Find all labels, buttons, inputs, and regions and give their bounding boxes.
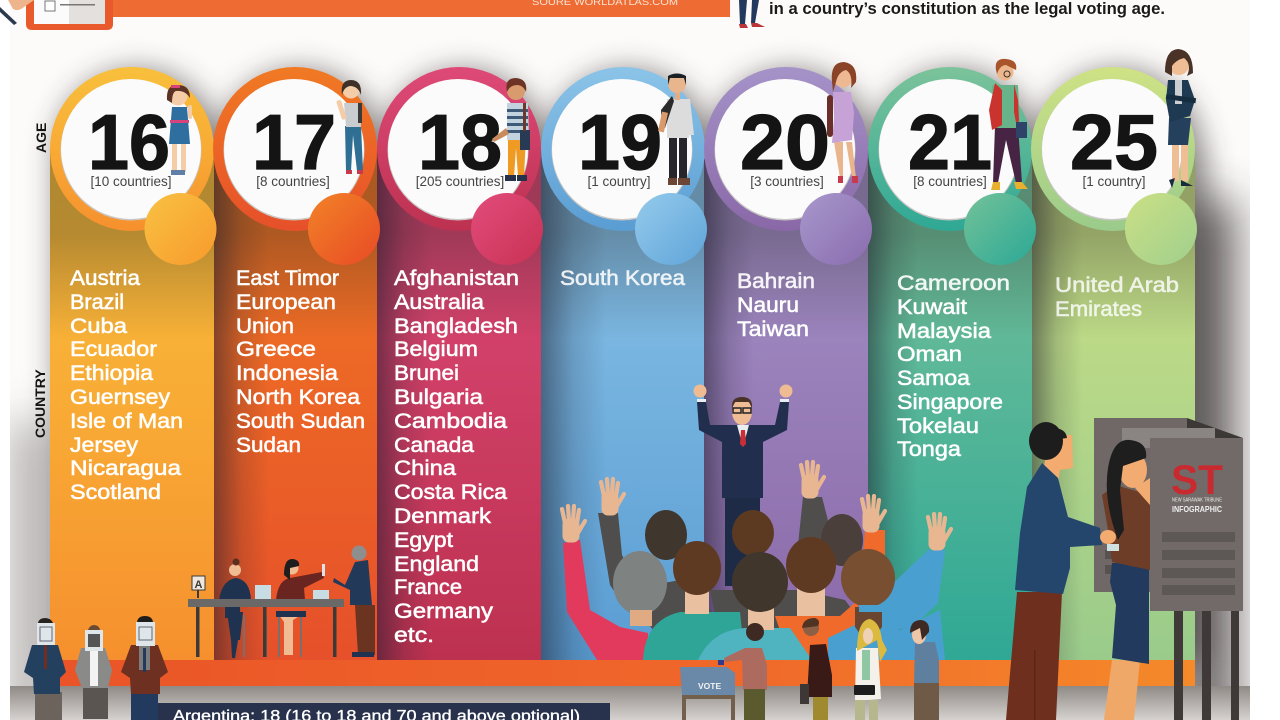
panel: age 19 column xyxy=(541,149,704,660)
decorative bubble: age 19 xyxy=(635,193,707,265)
country list: age 16 xyxy=(70,266,183,504)
age number 19: 19 xyxy=(578,98,662,186)
decorative bubble: age 17 xyxy=(308,193,380,265)
icon: ballot clipboard with hand xyxy=(0,0,113,30)
country list: age 18: Denmark xyxy=(394,504,491,528)
age number 17: 17 xyxy=(252,98,336,186)
ballot box label: VOTE xyxy=(698,681,721,691)
logo: publication name: NEW SARAWAK TRIBUNE xyxy=(1172,498,1223,504)
country list: age 18: Belgium xyxy=(394,337,478,361)
student figure 17 xyxy=(336,80,363,174)
footnote box xyxy=(158,703,610,720)
country list: age 25 xyxy=(1055,273,1179,321)
country list: age 17: Greece xyxy=(236,337,316,361)
ring: age 21 xyxy=(868,67,1032,231)
country list: age 16: Guernsey xyxy=(70,385,170,409)
country list: age 21: Cameroon xyxy=(897,271,1010,295)
orange base strip xyxy=(50,660,1195,686)
voting booth xyxy=(1094,418,1243,720)
age number 20: 20 xyxy=(740,98,830,186)
country list: age 16: Ethiopia xyxy=(70,361,153,385)
student figure 16 xyxy=(167,85,192,175)
age number 25: 25 xyxy=(1070,98,1158,186)
logo: infographic tag: INFOGRAPHIC xyxy=(1172,505,1222,514)
axis label: age: AGE xyxy=(33,123,49,153)
header bar xyxy=(110,0,730,17)
polling desk with officials xyxy=(188,546,375,658)
voters holding ballots xyxy=(24,616,168,720)
age number 18: 18 xyxy=(418,98,502,186)
country list: age 16: Ecuador xyxy=(70,337,157,361)
country list: age 16: Cuba xyxy=(70,314,127,338)
ring: age 20 xyxy=(704,67,868,231)
ring: age 25 xyxy=(1031,67,1195,231)
count label 17: [8 countries] xyxy=(256,174,330,189)
age number 21: 21 xyxy=(908,98,992,186)
count label 20: [3 countries] xyxy=(750,174,824,189)
panel: age 16 column xyxy=(50,149,214,660)
floor xyxy=(10,686,1250,720)
ring: age 18 xyxy=(377,67,541,231)
panel: age 17 column xyxy=(214,149,377,660)
booth front panel xyxy=(1150,438,1243,611)
decorative bubble: age 16 xyxy=(144,193,216,265)
logo: ST: ST xyxy=(1171,456,1223,503)
panel: age 20 column xyxy=(704,149,868,660)
country list: age 18: etc. xyxy=(394,623,434,647)
country list: age 21: Kuwait xyxy=(897,295,967,319)
woman voter xyxy=(1102,440,1150,720)
country list: age 25: Emirates xyxy=(1055,297,1142,321)
age number 16: 16 xyxy=(88,98,170,186)
country list: age 18: Australia xyxy=(394,290,484,314)
country list: age 16: Jersey xyxy=(70,433,138,457)
country list: age 21: Malaysia xyxy=(897,319,991,343)
country list: age 17: South Sudan xyxy=(236,409,365,433)
country list: age 18: Bulgaria xyxy=(394,385,483,409)
count label 21: [8 countries] xyxy=(913,174,987,189)
country list: age 16: Austria xyxy=(70,266,140,290)
polling desk with officials: A xyxy=(194,579,202,591)
country list: age 21: Tokelau xyxy=(897,414,979,438)
crowd with raised hands xyxy=(562,462,951,660)
country list: age 20: Nauru xyxy=(737,293,799,317)
ring: age 19 xyxy=(541,67,705,231)
student figure 19 xyxy=(658,74,694,185)
country list: age 17: European xyxy=(236,290,336,314)
decorative bubble: age 20 xyxy=(800,193,872,265)
country list: age 18: Costa Rica xyxy=(394,480,507,504)
note text: in a country’s constitution as the legal voting age. xyxy=(769,0,1165,18)
country list: age 16: Nicaragua xyxy=(70,456,181,480)
country list: age 21: Samoa xyxy=(897,366,970,390)
country list: age 16: Isle of Man xyxy=(70,409,183,433)
country list: age 19: South Korea xyxy=(560,266,685,290)
icon: person legs by note xyxy=(739,0,765,28)
country list: age 18: China xyxy=(394,456,456,480)
decorative bubble: age 18 xyxy=(471,193,543,265)
country list: age 17: North Korea xyxy=(236,385,360,409)
country list: age 21: Singapore xyxy=(897,390,1003,414)
country list: age 17 xyxy=(236,266,365,457)
country list: age 16: Scotland xyxy=(70,480,161,504)
decorative bubble: age 25 xyxy=(1125,193,1197,265)
country list: age 21: Tonga xyxy=(897,437,961,461)
panel: age 25 column xyxy=(1032,149,1195,660)
panel: age 21 column xyxy=(868,149,1032,660)
decorative bubble: age 21 xyxy=(964,193,1036,265)
country list: age 18: Brunei xyxy=(394,361,459,385)
ring: age 16 xyxy=(50,67,214,231)
country list: age 17: Indonesia xyxy=(236,361,338,385)
man voter xyxy=(1006,422,1119,720)
ballot box and queue xyxy=(680,618,939,720)
country list: age 21 xyxy=(897,271,1010,461)
candidate with raised fists xyxy=(694,384,792,586)
count label 25: [1 country] xyxy=(1082,174,1146,189)
student figure 21 xyxy=(989,59,1028,190)
country list: age 18: France xyxy=(394,575,462,599)
country list: age 18: Germany xyxy=(394,599,493,623)
country list: age 18: Canada xyxy=(394,433,474,457)
country list: age 18: Bangladesh xyxy=(394,314,518,338)
professional woman figure 25 xyxy=(1165,49,1196,188)
country list: age 18: England xyxy=(394,552,479,576)
country list: age 20: Taiwan xyxy=(737,317,809,341)
count label 16: [10 countries] xyxy=(90,174,172,189)
student figure 20 xyxy=(827,62,858,183)
country list: age 21: Oman xyxy=(897,342,962,366)
country list: age 25: United Arab xyxy=(1055,273,1179,297)
country list: age 18: Afghanistan xyxy=(394,266,519,290)
country list: age 17: Union xyxy=(236,314,294,338)
student figure 18 xyxy=(492,78,530,181)
panel: age 18 column xyxy=(377,149,541,660)
country list: age 20 xyxy=(737,269,815,341)
axis label: country: COUNTRY xyxy=(32,369,48,438)
country list: age 17: East Timor xyxy=(236,266,339,290)
country list: age 18 xyxy=(394,266,519,647)
country list: age 16: Brazil xyxy=(70,290,124,314)
country list: age 20: Bahrain xyxy=(737,269,815,293)
count label 19: [1 country] xyxy=(587,174,651,189)
country list: age 18: Egypt xyxy=(394,528,453,552)
country list: age 17: Sudan xyxy=(236,433,301,457)
country list: age 18: Cambodia xyxy=(394,409,507,433)
count label 18: [205 countries] xyxy=(416,174,504,189)
ring: age 17 xyxy=(213,67,377,231)
